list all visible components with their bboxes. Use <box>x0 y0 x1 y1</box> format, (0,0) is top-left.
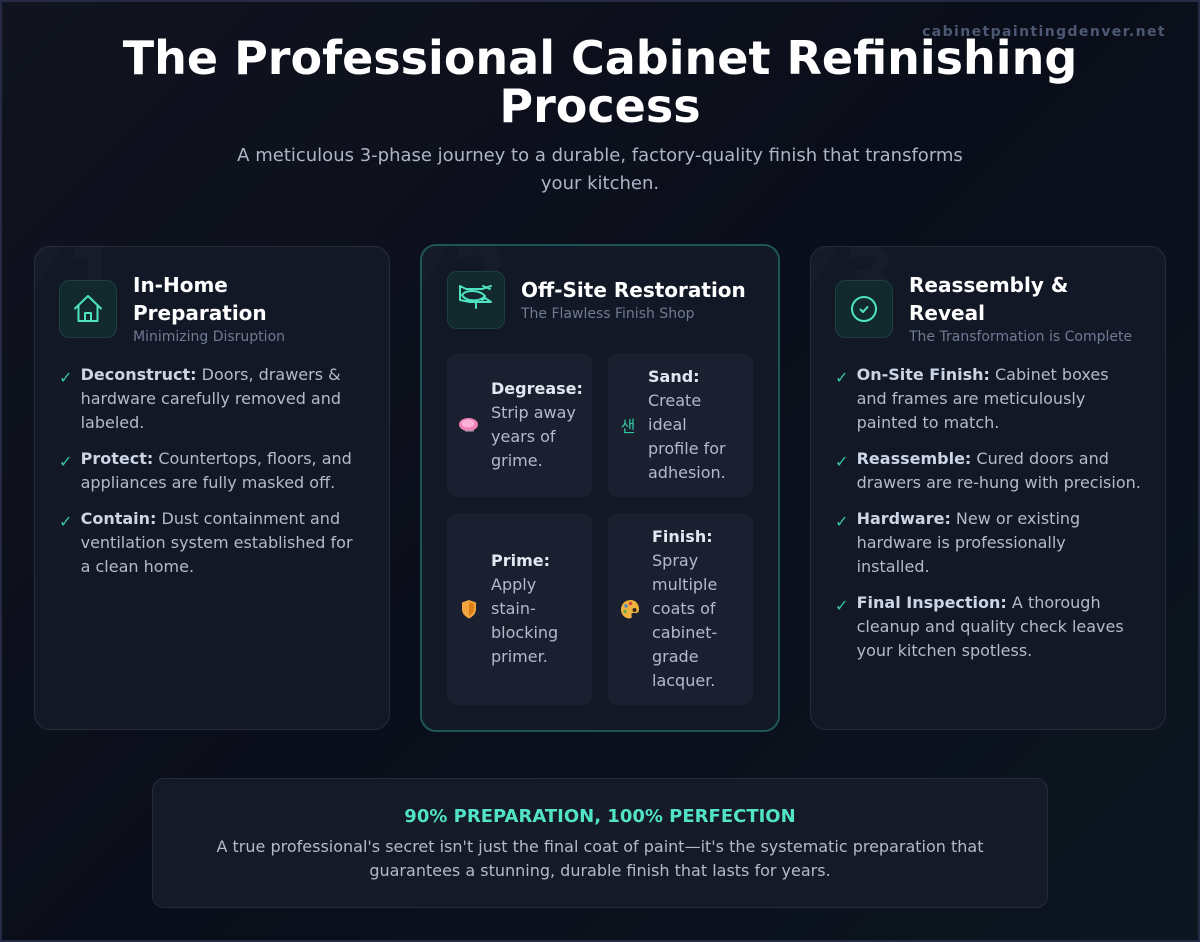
phase 3 checklist: On-Site Finish: Cabinet boxes and frames are meticulously painted to match. <box>857 365 1109 432</box>
subtitle: your kitchen. <box>541 173 659 194</box>
step: prime: Prime: Apply stain-blocking primer. <box>491 551 558 666</box>
panel: phase 1 in-home preparation <box>34 246 390 730</box>
icon: spray booth <box>447 271 505 329</box>
subtitle <box>237 145 963 194</box>
panel: phase 3 reassembly and reveal <box>810 246 1166 730</box>
phase 2 header <box>447 271 746 329</box>
phase 3 checklist: Hardware: New or existing hardware is professionally installed. <box>857 509 1080 576</box>
icon: orange shield <box>462 600 476 618</box>
phase 3 checklist: ✓ <box>835 452 848 471</box>
phase 2 header: Off-Site Restoration <box>521 278 746 302</box>
phase 1 checklist: Protect: Countertops, floors, and appliances are fully masked off. <box>81 449 352 492</box>
phase 3 header: Reassembly & <box>909 273 1068 297</box>
phase 1 header: Minimizing Disruption <box>133 329 285 345</box>
phase 1 checklist: ✓ <box>59 368 72 387</box>
step: sand: Sand: Create ideal profile for adhesion. <box>648 367 726 482</box>
phase 3 checklist: ✓ <box>835 596 848 615</box>
phase 1 header: In-Home <box>133 273 228 297</box>
phase 1 checklist <box>59 365 353 576</box>
icon: paint palette <box>621 600 639 618</box>
callout text: A true professional's secret isn't just the final coat of paint—it's the systematic preparation that guarantees a stunning, durable finish that lasts for years. <box>216 837 984 880</box>
title: The Professional Cabinet Refinishing <box>123 31 1077 85</box>
subtitle: A meticulous 3-phase journey to a durable, factory-quality finish that transforms <box>237 145 963 166</box>
step: degrease <box>447 353 592 497</box>
step: degrease: Degrease: Strip away years of grime. <box>491 379 583 470</box>
phase 3 checklist: ✓ <box>835 368 848 387</box>
phase 1 checklist: Contain: Dust containment and ventilation system established for a clean home. <box>81 509 353 576</box>
phase 3 checklist <box>835 365 1141 660</box>
watermark: site name: cabinetpaintingdenver.net <box>922 24 1166 40</box>
icon: pink cleaning blob <box>459 418 478 432</box>
step: sand <box>608 353 753 497</box>
phase 1 checklist: Deconstruct: Doors, drawers & hardware carefully removed and labeled. <box>81 365 341 432</box>
callout heading: 90% PREPARATION, 100% PERFECTION <box>404 806 796 827</box>
panel: phase 2 off-site restoration <box>420 244 780 732</box>
phase 3 header <box>835 273 1132 345</box>
icon: check circle <box>835 280 893 338</box>
phase 3 checklist: Reassemble: Cured doors and drawers are re-hung with precision. <box>857 449 1141 492</box>
phase 2 header: The Flawless Finish Shop <box>521 306 695 322</box>
phase 1 checklist: ✓ <box>59 512 72 531</box>
phase 1 checklist: ✓ <box>59 452 72 471</box>
title <box>122 31 1077 133</box>
process steps grid <box>447 353 753 705</box>
icon: sand glyph: 샌 <box>621 413 635 437</box>
phase 3 checklist: ✓ <box>835 512 848 531</box>
phase 3 header: The Transformation is Complete <box>909 329 1132 345</box>
phase 1 header: Preparation <box>133 301 267 325</box>
title: Process <box>499 79 701 133</box>
icon: house <box>59 280 117 338</box>
step: prime <box>447 513 592 705</box>
phase 3 header: Reveal <box>909 301 985 325</box>
phase 1 header <box>59 273 285 345</box>
step: finish <box>608 513 753 705</box>
step: finish: Finish: Spray multiple coats of cabinet-grade lacquer. <box>652 527 717 690</box>
callout: preparation summary <box>152 778 1048 908</box>
phase 3 checklist: Final Inspection: A thorough cleanup and quality check leaves your kitchen spotless. <box>857 593 1124 660</box>
